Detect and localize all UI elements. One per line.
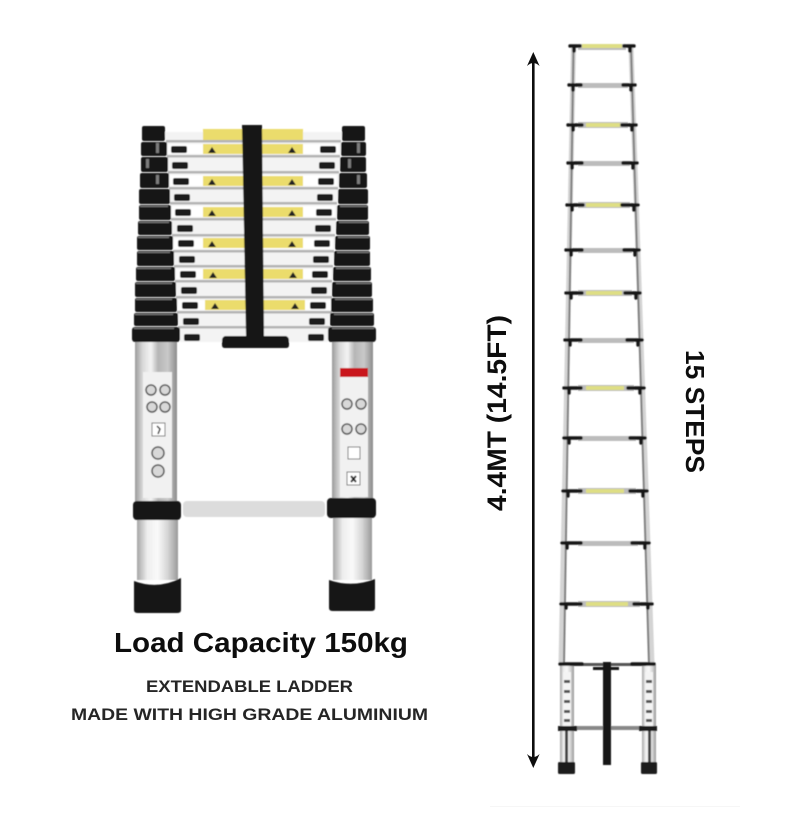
black step clips xyxy=(560,46,654,664)
left lower leg xyxy=(133,342,181,613)
extended ladder xyxy=(558,44,657,774)
ladder strap xyxy=(593,662,619,765)
rungs panel xyxy=(165,132,342,342)
left safety sticker xyxy=(143,372,172,498)
right lower leg xyxy=(327,342,376,611)
lower ladder tubes xyxy=(560,664,656,762)
right safety sticker xyxy=(340,368,368,497)
caption: made with high grade aluminium: MADE WITH HIGH GRADE ALUMINIUM xyxy=(71,706,428,724)
warning triangles xyxy=(208,147,299,309)
left black telescopic stack xyxy=(132,126,180,342)
steps xyxy=(558,44,657,731)
yellow warning labels xyxy=(203,129,305,310)
black rung pads xyxy=(171,146,336,341)
steps label: 15 STEPS xyxy=(680,350,710,473)
ladder rails xyxy=(561,47,652,664)
right black telescopic stack xyxy=(328,126,376,342)
ladder feet xyxy=(558,762,657,774)
height arrow xyxy=(527,52,540,768)
height label: 4.4MT (14.5FT) xyxy=(482,315,512,511)
bottom grey step xyxy=(183,501,325,517)
collapsed ladder xyxy=(132,125,376,613)
caption: extendable ladder: EXTENDABLE LADDER xyxy=(146,678,353,696)
caption: load capacity: Load Capacity 150kg xyxy=(114,627,408,658)
carry strap xyxy=(222,125,289,348)
yellow step labels xyxy=(582,44,628,606)
